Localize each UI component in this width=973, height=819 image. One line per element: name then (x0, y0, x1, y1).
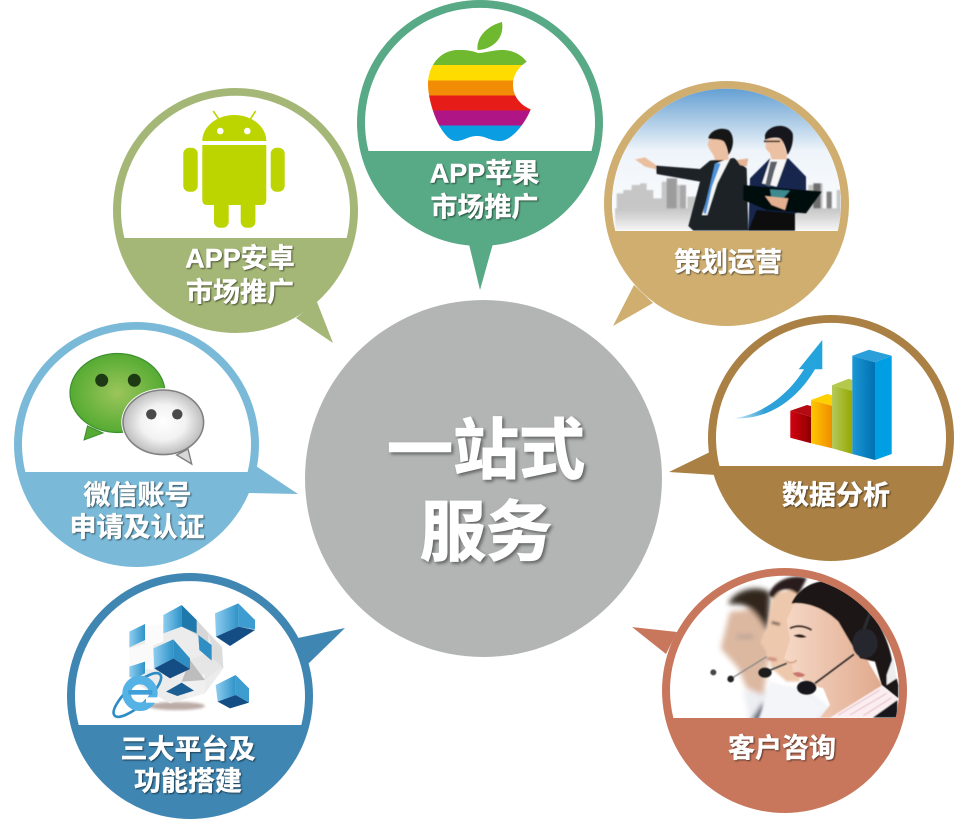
bubble: three platforms and feature build (67, 573, 345, 819)
bubble: APP apple market promotion (357, 0, 603, 290)
label (185, 244, 295, 308)
label: 市场推广 (186, 278, 294, 308)
label (70, 480, 204, 542)
icon: wechat bubbles (70, 354, 205, 464)
icon: rainbow apple (428, 22, 531, 141)
bubble: planning and operations (604, 81, 849, 326)
label: 策划运营 (674, 248, 782, 278)
label: 数据分析 (782, 480, 890, 510)
center circle (305, 300, 662, 657)
icon: android robot (183, 111, 285, 228)
label: 市场推广 (430, 192, 538, 222)
bubble: data analysis (669, 315, 954, 561)
label: 三大平台及 (120, 734, 256, 764)
label (120, 734, 256, 796)
back agent (721, 588, 830, 722)
middle agent microphone (758, 663, 787, 678)
center title: 服务 (420, 495, 552, 569)
label: APP安卓 (185, 244, 295, 274)
icon: cube and browser logo (108, 603, 255, 723)
middle agent (758, 576, 820, 718)
label: 功能搭建 (134, 766, 242, 796)
label (430, 158, 539, 222)
label: 微信账号 (84, 480, 192, 510)
photo: two businessmen with skyline (610, 85, 845, 231)
label: 申请及认证 (70, 512, 204, 542)
center title: 一站式 (387, 413, 585, 487)
bubble: customer consulting (632, 568, 907, 813)
icon: 3D bar chart (790, 350, 892, 460)
man 1 (656, 158, 748, 231)
folder (743, 185, 822, 213)
photo: call center agents (710, 577, 898, 722)
bubble: wechat account (14, 322, 298, 567)
label: 客户咨询 (728, 734, 836, 764)
center title (387, 413, 585, 569)
front agent (784, 581, 898, 718)
icon: rising arrow (734, 340, 822, 418)
back agent microphones (710, 657, 767, 682)
label: APP苹果 (430, 158, 539, 188)
man 2 (748, 158, 806, 231)
bubble: APP android market promotion (113, 88, 358, 343)
